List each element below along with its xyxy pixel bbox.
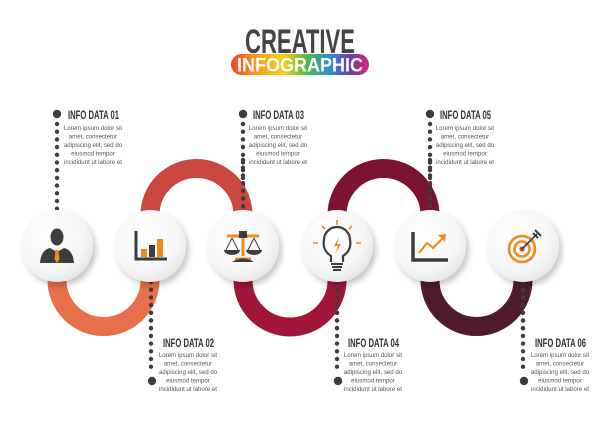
title: CREATIVE <box>245 23 355 61</box>
text: info 04: Lorem ipsum dolor sit <box>344 352 402 359</box>
text: info 05: amet, consectetur <box>441 134 489 140</box>
text: info 06 <box>531 338 590 393</box>
text: info 06: Lorem ipsum dolor sit <box>531 352 589 359</box>
text: info 03: amet, consectetur <box>254 134 302 140</box>
text: info 03: Lorem ipsum dolor sit <box>249 125 307 132</box>
text: info 01: eiusmod tempor <box>71 150 115 158</box>
text: info 05: Lorem ipsum dolor sit <box>436 125 494 132</box>
text: info 02: INFO DATA 02 <box>163 338 214 350</box>
text: info 03: INFO DATA 03 <box>253 110 304 122</box>
text: info 06: incididunt ut labore et <box>531 386 589 393</box>
text: info 06: eiusmod tempor <box>538 378 582 384</box>
dotted connectors <box>53 110 528 385</box>
text: info 04: eiusmod tempor <box>351 378 395 384</box>
icon: target <box>509 230 541 262</box>
text: info 02 <box>159 338 218 393</box>
text: info 01: adipiscing elit, sed do <box>64 142 123 149</box>
text: info 06: amet, consectetur <box>536 360 584 368</box>
text: info 01: incididunt ut labore et <box>64 159 122 166</box>
text: info 02: eiusmod tempor <box>166 378 210 384</box>
icon: person <box>40 228 74 263</box>
title <box>231 23 369 76</box>
icon: light bulb <box>313 220 361 270</box>
dots over track <box>151 160 523 330</box>
text: info 04: adipiscing elit, sed do <box>344 369 403 376</box>
text: info 05: incididunt ut labore et <box>436 159 494 166</box>
text: info 01: INFO DATA 01 <box>68 110 119 122</box>
icon: trend chart <box>413 232 448 260</box>
text: info 02: incididunt ut labore et <box>159 386 217 393</box>
text: info 04: INFO DATA 04 <box>348 338 399 350</box>
text: info 05: INFO DATA 05 <box>440 110 491 122</box>
text: info 05: adipiscing elit, sed do <box>436 142 495 149</box>
text: info 05: eiusmod tempor <box>443 150 487 158</box>
text: info 04 <box>344 338 403 393</box>
text: info 02: adipiscing elit, sed do <box>159 369 218 376</box>
icon: bar chart <box>136 231 167 259</box>
text: info 02: amet, consectetur <box>164 360 212 368</box>
text: info 06: adipiscing elit, sed do <box>531 369 590 376</box>
icon: scales <box>224 231 262 262</box>
text: info 03: eiusmod tempor <box>256 150 300 158</box>
text: info 05 <box>436 110 495 166</box>
text: info 03 <box>249 110 308 166</box>
text: info 04: incididunt ut labore et <box>344 386 402 393</box>
text: info 01: amet, consectetur <box>69 134 117 140</box>
text: info 01: Lorem ipsum dolor sit <box>64 125 122 132</box>
circles <box>21 210 559 282</box>
title pill: INFOGRAPHIC <box>237 56 363 76</box>
text: info 03: incididunt ut labore et <box>249 159 307 166</box>
text: info 04: amet, consectetur <box>349 360 397 368</box>
text: info 01 <box>64 110 123 166</box>
wave track <box>57 168 523 327</box>
text: info 02: Lorem ipsum dolor sit <box>159 352 217 359</box>
text: info 03: adipiscing elit, sed do <box>249 142 308 149</box>
